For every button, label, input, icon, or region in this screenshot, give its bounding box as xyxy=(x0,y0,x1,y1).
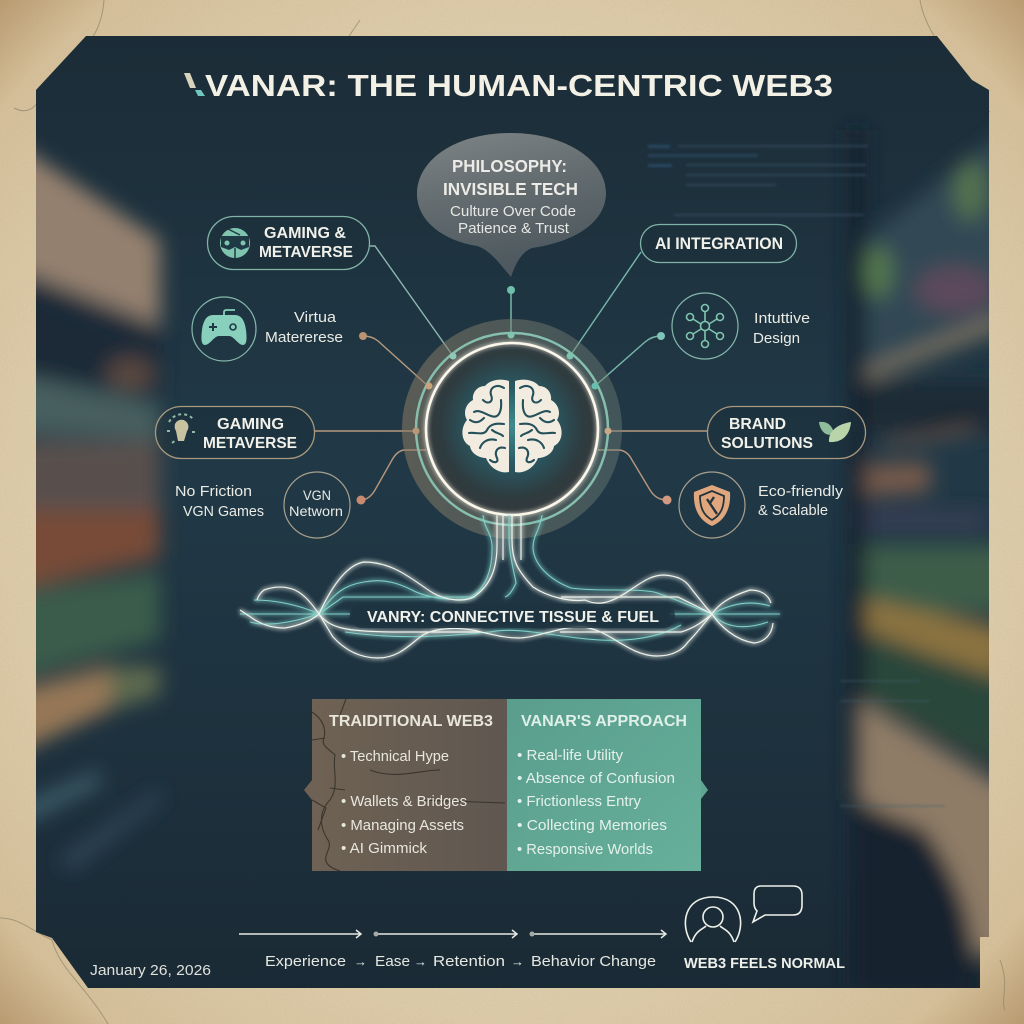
panel: traditional web3: TRAIDITIONAL WEB3 xyxy=(329,713,493,730)
icon: lightbulb xyxy=(167,414,197,443)
journey text: → xyxy=(354,954,367,969)
panel: vanar's approach xyxy=(507,699,708,871)
pill: gaming metaverse: METAVERSE xyxy=(203,435,297,452)
comparison table xyxy=(304,699,708,871)
icon: leaves xyxy=(819,422,851,442)
panel: traditional web3 xyxy=(304,699,507,871)
panel: vanar's approach: • Responsive Worlds xyxy=(517,842,653,858)
connector dots xyxy=(356,286,672,504)
VANRY label xyxy=(350,604,675,628)
speech bubble: philosophy: Culture Over Code xyxy=(450,204,576,220)
journey text: → xyxy=(511,954,524,969)
journey text: → xyxy=(414,954,427,969)
central brain hub xyxy=(356,286,672,539)
VGN network circle: Networn xyxy=(289,504,343,519)
pill: gaming and metaverse: GAMING & xyxy=(264,225,346,242)
panel: traditional web3: • Managing Assets xyxy=(341,818,464,834)
panel: traditional web3: • Wallets & Bridges xyxy=(341,794,467,810)
text: no friction: VGN Games xyxy=(183,504,264,520)
intuitive design item with network icon: Design xyxy=(753,331,800,347)
pill: brand solutions xyxy=(708,406,866,458)
virtua item with controller icon: Virtua xyxy=(294,310,337,326)
pill: brand solutions: SOLUTIONS xyxy=(721,435,813,452)
date: January 26, 2026 xyxy=(90,963,211,979)
text: no friction xyxy=(175,484,264,520)
panel: vanar's approach: • Collecting Memories xyxy=(517,818,667,834)
text: no friction: No Friction xyxy=(175,484,252,500)
speech bubble: philosophy: Patience & Trust xyxy=(458,221,569,237)
virtua item with controller icon: Matererese xyxy=(265,330,343,346)
icon: person with speech bubble xyxy=(685,886,802,942)
panel: vanar's approach: VANAR'S APPROACH xyxy=(521,713,687,730)
pill: gaming metaverse xyxy=(156,406,314,458)
journey text: Behavior Change xyxy=(531,953,656,970)
journey text xyxy=(265,953,656,970)
journey text: Retention xyxy=(433,953,505,970)
pill: gaming and metaverse: METAVERSE xyxy=(259,244,353,261)
panel: vanar's approach: • Frictionless Entry xyxy=(517,794,642,810)
speech bubble: philosophy: INVISIBLE TECH xyxy=(443,179,578,199)
speech bubble: philosophy xyxy=(417,133,606,277)
eco-friendly item with shield icon: & Scalable xyxy=(758,503,828,519)
VANRY energy waves xyxy=(240,515,780,658)
intuitive design item with network icon xyxy=(672,293,810,359)
icon: shield xyxy=(694,485,730,526)
pill: AI integration: AI INTEGRATION xyxy=(655,235,783,253)
VANRY label: VANRY: CONNECTIVE TISSUE & FUEL xyxy=(367,609,659,626)
connector lines xyxy=(315,246,707,500)
panel: traditional web3: • Technical Hype xyxy=(341,749,449,765)
progress arrows xyxy=(239,930,666,938)
intuitive design item with network icon: Intuttive xyxy=(754,311,810,327)
pill: gaming and metaverse xyxy=(208,216,370,270)
icon: node network xyxy=(686,304,724,348)
virtua item with controller icon xyxy=(192,297,343,361)
journey text: Ease xyxy=(375,953,410,970)
eco-friendly item with shield icon: Eco-friendly xyxy=(758,484,844,500)
pill: gaming metaverse: GAMING xyxy=(217,416,284,433)
speech bubble: philosophy: PHILOSOPHY: xyxy=(452,156,567,176)
title: VANAR: THE HUMAN-CENTRIC WEB3 xyxy=(205,68,833,103)
panel: vanar's approach: • Absence of Confusion xyxy=(517,771,675,787)
VGN network circle: VGN xyxy=(303,488,331,503)
icon: brain xyxy=(462,380,562,472)
pill: AI integration xyxy=(640,224,796,262)
text: web3 feels normal: WEB3 FEELS NORMAL xyxy=(684,956,845,972)
pill: brand solutions: BRAND xyxy=(729,416,786,433)
journey text: Experience xyxy=(265,953,346,970)
panel: vanar's approach: • Real-life Utility xyxy=(517,748,624,764)
icon: game controller xyxy=(201,310,247,345)
icon: VR headset xyxy=(220,228,250,258)
VGN network circle xyxy=(284,472,350,538)
eco-friendly item with shield icon xyxy=(679,472,844,538)
panel: traditional web3: • AI Gimmick xyxy=(341,841,428,857)
